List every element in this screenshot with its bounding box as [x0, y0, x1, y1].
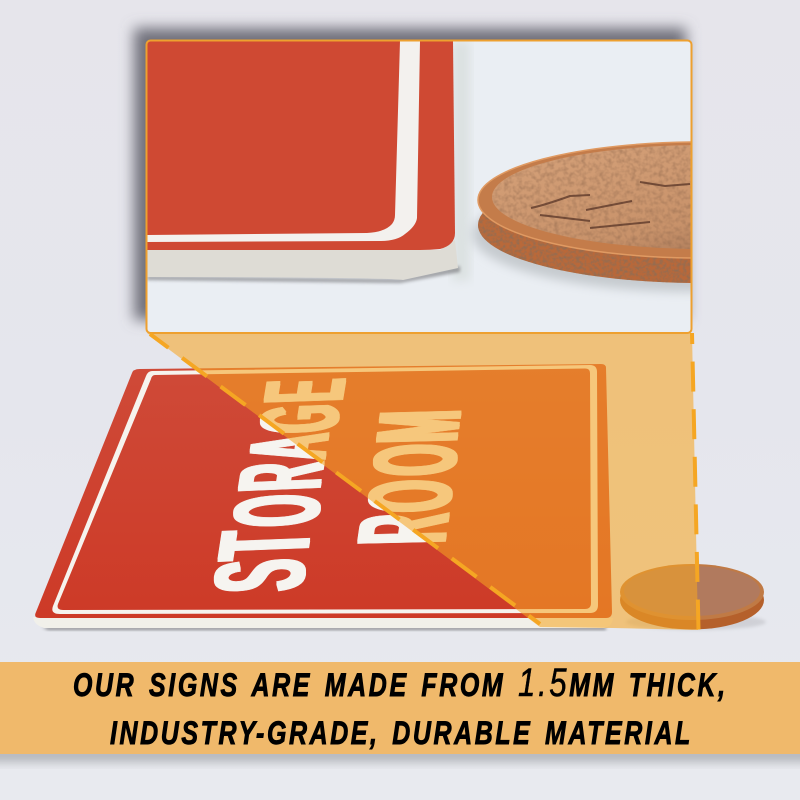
sign text: ROOM: R [331, 513, 477, 546]
sign text: STORAGE: E [239, 378, 370, 404]
sign text: ROOM: O [347, 443, 484, 477]
macro sign white line [147, 41, 420, 242]
sign text: STORAGE: G [236, 403, 364, 435]
sign text: ROOM [331, 409, 487, 546]
sign text: ROOM: O [342, 478, 479, 514]
macro sign red face [147, 41, 455, 250]
highlighted projection overlay [147, 333, 698, 630]
banner text [73, 660, 725, 752]
sign text: STORAGE: R [212, 460, 350, 493]
sign text: STORAGE: A [224, 432, 353, 463]
banner text: INDUSTRY-GRADE, DURABLE MATERIAL [110, 716, 690, 752]
banner text: OUR SIGNS ARE MADE FROM 1.5MM THICK, [73, 660, 725, 705]
sign red face [35, 364, 612, 618]
sign shadow line [42, 627, 606, 630]
sign text: STORAGE: T [190, 528, 339, 562]
panel border [146, 40, 692, 333]
caption banner [0, 660, 800, 754]
sign text: STORAGE: O [208, 492, 348, 529]
large penny rim [478, 213, 690, 283]
sign white border line [52, 365, 598, 614]
sign text: STORAGE: S [185, 557, 334, 595]
panel background [147, 41, 691, 332]
large penny rim texture [478, 214, 690, 283]
banner shadow [0, 748, 800, 762]
banner background [0, 662, 800, 754]
large penny engraving [531, 182, 690, 228]
penny rim [620, 570, 764, 630]
zoom panel: macro view [148, 42, 690, 332]
macro sign edge [147, 240, 458, 280]
small penny [620, 564, 766, 630]
macro sign shadow [147, 266, 460, 283]
large penny face texture [492, 146, 690, 249]
panel shadow [134, 28, 686, 320]
sign text: STORAGE [185, 378, 370, 595]
sign edge thickness [33, 617, 613, 628]
contact shadow beside sign [452, 41, 470, 281]
dashed projection line: right [692, 333, 698, 630]
dashed projection line: left [150, 334, 540, 624]
sign: full view [33, 364, 613, 630]
sign text: ROOM: M [352, 409, 487, 444]
penny face [620, 564, 764, 620]
large penny upper ring [477, 141, 690, 259]
large penny face [492, 145, 690, 249]
penny shadow [626, 614, 766, 630]
large penny shadow [470, 212, 690, 296]
